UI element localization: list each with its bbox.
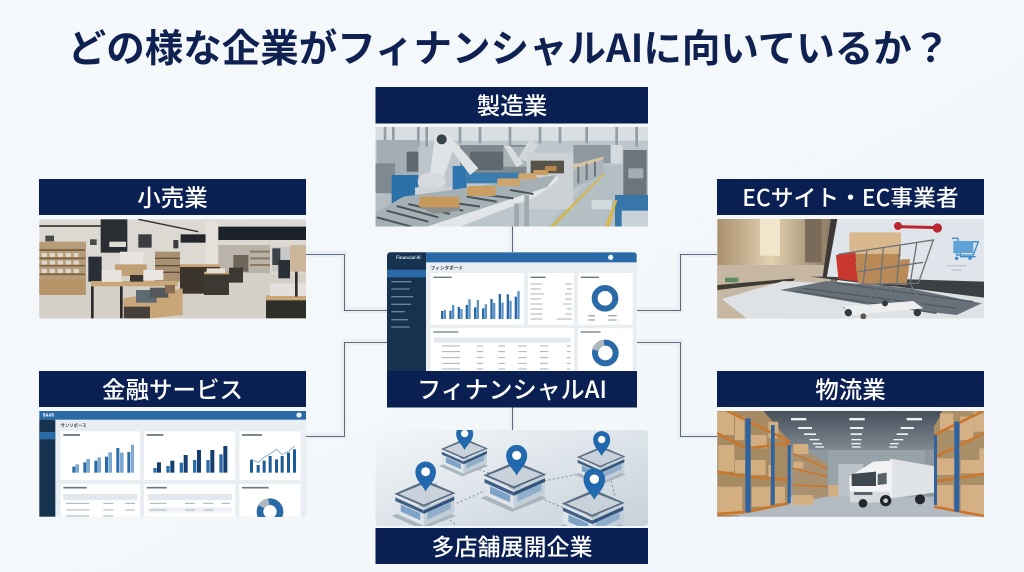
image: factory conveyor with robots (375, 127, 648, 227)
hub header: フィナンシャルAI (417, 370, 607, 405)
panel: retail (39, 179, 306, 318)
store top right (575, 448, 626, 483)
manufacturing header: 製造業 (477, 87, 547, 121)
manufacturing header (376, 87, 648, 124)
store top left (439, 439, 488, 476)
store center (481, 461, 547, 512)
image: warehouse with truck (717, 411, 984, 517)
financial services header (39, 371, 306, 407)
panel: e-commerce (717, 179, 984, 319)
multi-store header: 多店舗展開企業 (432, 528, 592, 562)
retail header: 小売業 (137, 179, 208, 213)
pin top left (456, 430, 474, 450)
panel: multi-store companies (375, 425, 648, 564)
image: financial AI dashboard: フィンタボード (431, 265, 464, 272)
pin center (506, 445, 527, 476)
image: finance dashboard (39, 411, 306, 522)
image: financial AI dashboard: Financial AI (396, 254, 421, 261)
logistics header (717, 371, 984, 407)
pin top right (593, 431, 610, 456)
multi-store header (376, 528, 648, 564)
panel: financial AI hub (387, 252, 637, 408)
connectors between industries and financial AI (306, 226, 717, 436)
image: financial AI dashboard (387, 252, 637, 372)
title: どの様な企業がフィナンシャルAIに向いているか？ (68, 18, 950, 74)
panel: logistics (717, 371, 984, 517)
e-commerce header: ECサイト・EC事業者 (742, 180, 959, 213)
image: finance dashboard: SaaS (43, 413, 54, 419)
pin lower right (584, 468, 605, 500)
image: stores with map pins (376, 430, 648, 526)
financial services header: 金融サービス (102, 371, 243, 405)
pin lower left (415, 461, 436, 492)
image: retail store interior (39, 219, 306, 318)
panel: financial services (39, 371, 306, 522)
store lower right (560, 492, 625, 526)
panel: manufacturing (375, 87, 648, 227)
image: finance dashboard: サンリボース (61, 422, 86, 429)
logistics header: 物流業 (815, 371, 886, 405)
retail header (39, 179, 306, 215)
image: shopping cart on laptop (717, 219, 984, 319)
store lower left (392, 482, 456, 526)
